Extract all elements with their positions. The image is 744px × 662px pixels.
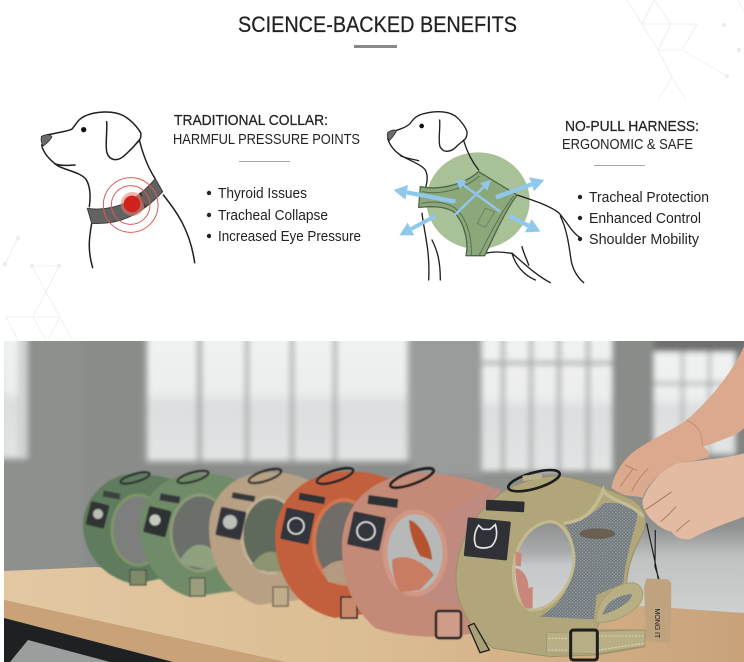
harness 5: dusty pink [341,466,501,640]
dog nose and eye [387,124,424,141]
heading: no-pull harness: NO-PULL HARNESS: [565,118,699,135]
title: SCIENCE-BACKED BENEFITS [238,12,517,37]
hands [612,347,744,539]
harness 2: moss green [140,468,246,597]
label tab [486,500,525,512]
dog outline: harness [388,112,584,283]
list: harness benefits: Tracheal Protection [589,189,709,206]
rim [563,490,643,523]
harness 6: olive front [456,466,671,660]
panel: traditional collar illustration [41,112,195,268]
pocket [596,583,643,623]
pressure rings [103,178,158,232]
harness 4: terracotta orange [275,465,396,618]
list: collar harms: Increased Eye Pressure [218,228,361,245]
body [456,476,646,657]
divider [239,161,290,162]
heading: traditional collar: HARMFUL PRESSURE POINTS [173,131,360,148]
mesh panel [540,503,637,619]
lower hand [642,453,744,539]
harness 3: tan [209,466,316,606]
title underline [354,45,397,48]
divider [594,165,645,166]
photo: harness lineup on table [0,335,744,662]
tag cord [647,523,659,580]
list: collar harms: Thyroid Issues [218,185,307,202]
upper arm and hand [612,347,744,497]
list: harness benefits: Enhanced Control [589,210,701,227]
hang tag: MONG IT [653,608,662,639]
dog nose and eye [41,127,86,146]
list: collar harms [207,185,361,245]
patch [464,517,511,560]
green highlight circle [426,152,530,249]
harness vest [419,172,517,256]
hang tag [644,578,671,643]
list: collar harms: Tracheal Collapse [218,207,328,224]
photo background: room with windows [0,335,744,662]
list: harness benefits: Shoulder Mobility [589,231,699,248]
movement arrows [394,177,544,235]
collar band [87,179,163,223]
side clip [468,623,489,653]
webbing loop [522,474,542,481]
D-ring [506,468,562,493]
background: faint network pattern [3,0,744,340]
heading: no-pull harness: ERGONOMIC & SAFE [562,136,693,153]
harness 1: sage green [83,470,178,585]
heading: no-pull harness [562,118,699,153]
buckle [571,630,597,660]
list: harness benefits [578,189,709,248]
hole [513,522,574,610]
table [4,567,744,662]
heading: traditional collar: TRADITIONAL COLLAR: [174,112,328,129]
dog outline: collar [42,112,195,268]
panel: no-pull harness illustration [387,112,584,283]
strap [547,630,645,653]
heading: traditional collar [173,112,360,148]
